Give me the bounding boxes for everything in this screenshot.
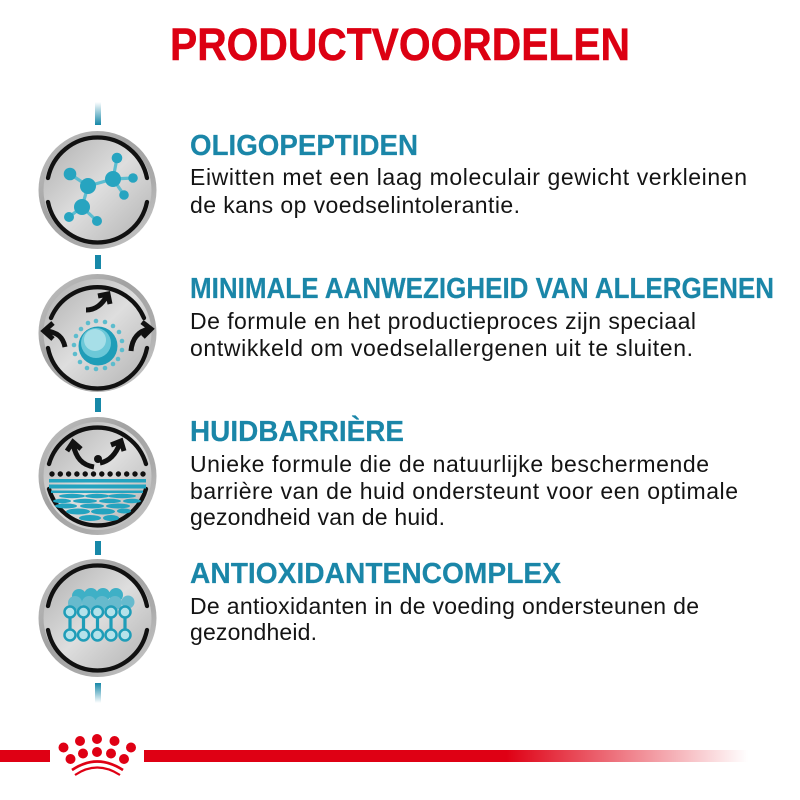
icon: allergens	[38, 274, 156, 392]
text: allergens: De formule en het productieproces zijn speciaal	[190, 308, 696, 334]
text: antioxidant complex	[190, 593, 699, 645]
heading: skin barrier: HUIDBARRIÈRE	[190, 414, 404, 448]
footer line right	[144, 750, 748, 762]
icon: antioxidant complex	[38, 559, 156, 677]
icon: molecule	[38, 131, 156, 249]
icon: skin barrier	[38, 417, 156, 535]
barrier dots	[49, 471, 146, 477]
heading: oligopeptiden: OLIGOPEPTIDEN	[190, 130, 418, 162]
text: allergens: ontwikkeld om voedselallergenen uit te sluiten.	[190, 335, 693, 361]
text: oligopeptiden: Eiwitten met een laag moleculair gewicht verkleinen	[190, 164, 747, 190]
footer line left	[0, 750, 50, 762]
text: antioxidant complex: gezondheid.	[190, 619, 317, 645]
heading: antioxidant complex: ANTIOXIDANTENCOMPLEX	[190, 558, 562, 590]
text: skin barrier: barrière van de huid ondersteunt voor een optimale	[190, 478, 738, 504]
arrows	[67, 441, 124, 467]
text: oligopeptiden: de kans op voedselintolerantie.	[190, 192, 520, 218]
text: antioxidant complex: De antioxidanten in de voeding ondersteunen de	[190, 593, 699, 619]
text: allergens	[190, 308, 696, 361]
text: skin barrier: Unieke formule die de natuurlijke beschermende	[190, 451, 709, 477]
text: skin barrier: gezondheid van de huid.	[190, 504, 445, 530]
skin layers	[49, 479, 146, 521]
title: PRODUCTVOORDELEN	[170, 19, 630, 70]
arrows	[44, 294, 151, 351]
text: skin barrier	[190, 451, 738, 530]
logo: royal crown	[58, 734, 136, 775]
text: oligopeptiden	[190, 164, 747, 218]
timeline connector	[95, 102, 101, 703]
